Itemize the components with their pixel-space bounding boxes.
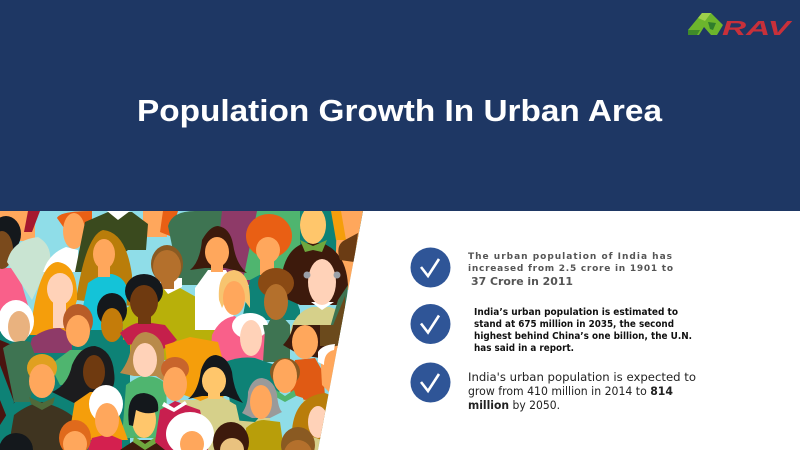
dark skin man in maroon	[120, 274, 177, 350]
list item 3	[410, 362, 696, 412]
bottom brown hair man	[281, 427, 315, 450]
yellow orange body	[165, 337, 224, 401]
bob black hair woman	[188, 355, 243, 421]
white curly person bottom	[166, 412, 214, 450]
white hair old woman	[88, 385, 123, 450]
text block 3: India's urban population is expected to	[468, 370, 696, 384]
long hair woman	[76, 230, 132, 330]
lower filler shapes	[0, 330, 320, 450]
text block 3: grow from 410 million in 2014 to 814	[468, 384, 673, 398]
black hair woman small	[120, 393, 165, 450]
mint jacket person	[7, 237, 50, 300]
icon: check circle 2	[410, 304, 450, 344]
dark jacket man with green collar	[280, 206, 348, 305]
brown curly man	[258, 268, 294, 362]
title: Population Growth In Urban Area	[137, 93, 663, 128]
black curly bottom left	[0, 433, 33, 450]
orange hair woman	[28, 262, 77, 353]
text block 3	[468, 370, 696, 412]
orange curly man	[43, 211, 92, 272]
black hair brown person	[97, 293, 127, 342]
tan hair woman at right	[292, 393, 330, 440]
teal and green filler bodies	[55, 340, 128, 385]
text block 2	[474, 307, 692, 354]
text block 3: million by 2050.	[468, 398, 560, 412]
text block 1: The urban population of India has	[468, 252, 672, 262]
list item 2	[410, 304, 692, 354]
bob hair woman	[190, 226, 247, 330]
back row backgrounds	[0, 211, 363, 290]
brown hair at right	[338, 233, 358, 262]
illustration: crowd of people	[0, 206, 363, 450]
logo: RAV: RAV	[722, 18, 793, 40]
green top figure right	[263, 325, 268, 334]
text block 2: has said in a report.	[474, 343, 574, 354]
icon: check circle 1	[410, 248, 450, 288]
ginger short man	[63, 304, 93, 347]
text block 2: India’s urban population is estimated to	[474, 307, 678, 318]
orange top woman	[283, 325, 327, 400]
text block 1	[468, 252, 673, 288]
white hair old person	[0, 300, 34, 343]
bottom maroon hair woman	[213, 422, 249, 450]
bald man	[290, 259, 348, 350]
brown hair man in olive	[123, 245, 195, 345]
curly orange hair woman	[243, 214, 300, 320]
blonde woman	[210, 270, 250, 362]
black long hair woman	[52, 346, 128, 440]
list item 1	[410, 248, 673, 288]
logo: RAV	[688, 13, 793, 40]
text block 1: increased from 2.5 crore in 1901 to	[468, 264, 673, 274]
blonde hair man in dark jacket	[10, 354, 72, 450]
text block 2: highest behind China’s one billion, the U.N.	[474, 331, 692, 342]
tan hair woman	[120, 332, 168, 438]
left dark hair person	[0, 216, 30, 312]
brown hair man in light blue	[270, 358, 304, 438]
dark green jacket man	[75, 211, 148, 272]
orange hair bottom left	[59, 420, 91, 450]
right edge figure	[318, 325, 340, 395]
text block 2: stand at 675 million in 2035, the second	[474, 319, 674, 330]
ginger man in crimson	[155, 357, 208, 450]
icon: check circle 3	[410, 362, 450, 402]
teal body woman	[225, 358, 280, 422]
text block 1: 37 Crore in 2011	[471, 275, 573, 288]
pink body old woman	[232, 313, 268, 360]
gray hair woman	[242, 378, 284, 450]
header band	[0, 0, 800, 211]
dark green body person	[3, 341, 37, 402]
